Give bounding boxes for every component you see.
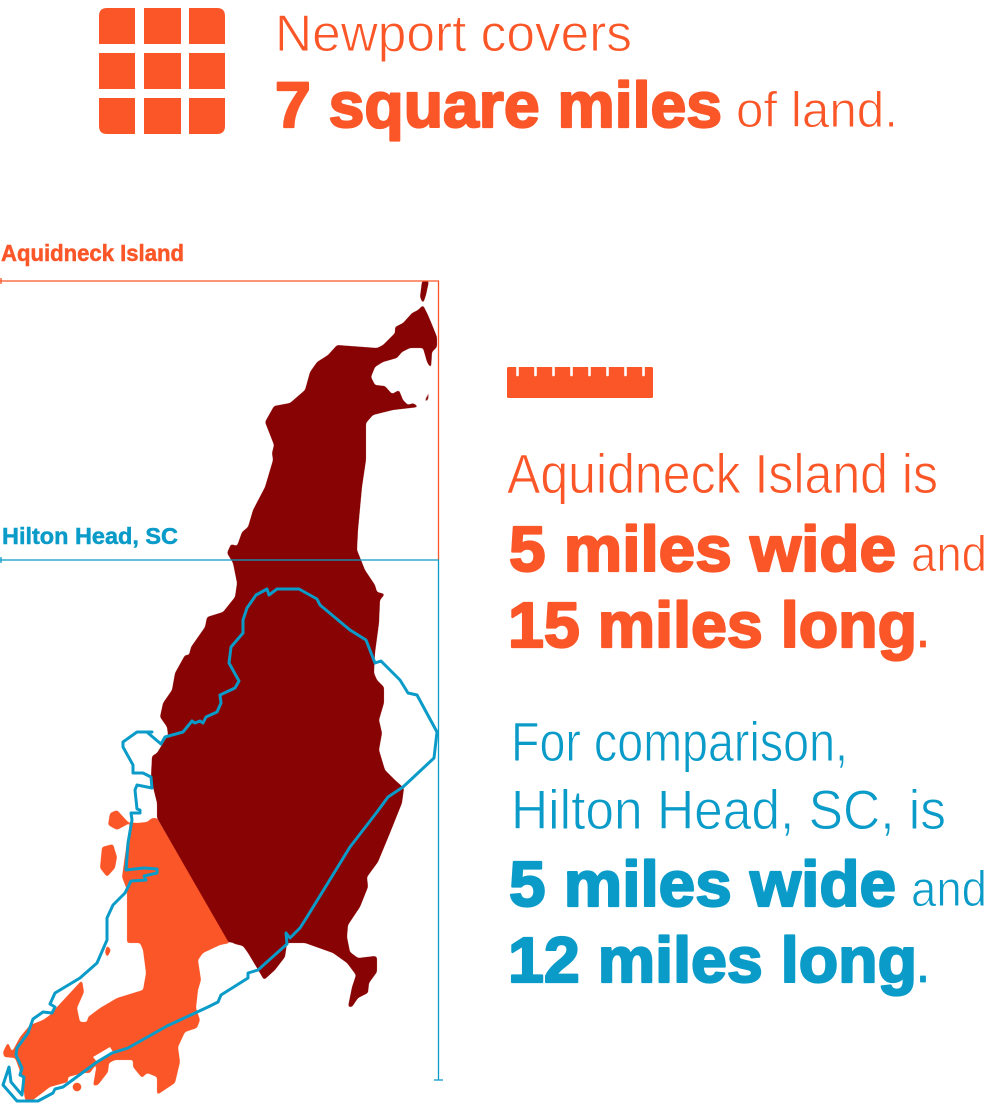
text: Aquidneck Island dimensions: and xyxy=(911,526,987,582)
text: Aquidneck Island dimensions: Aquidneck Island is xyxy=(507,442,938,505)
heading: Newport covers 7 square miles of land: Newport covers xyxy=(275,5,632,63)
map: Newport orange area xyxy=(3,810,230,1100)
text: Hilton Head comparison: . xyxy=(918,947,928,991)
text: Hilton Head comparison: 12 miles long xyxy=(508,924,917,996)
text: Aquidneck Island dimensions: 15 miles long xyxy=(508,589,917,661)
map: white inlet in Newport xyxy=(93,1047,113,1062)
text: Hilton Head comparison: Hilton Head, SC, is xyxy=(511,778,946,841)
icon: square-mile grid xyxy=(99,8,225,134)
text: Aquidneck Island dimensions: . xyxy=(918,612,928,656)
icon: ruler xyxy=(507,366,653,398)
map: Aquidneck Island dark red shape xyxy=(151,281,437,1007)
text: Aquidneck Island dimensions xyxy=(507,442,987,661)
map: Hilton Head blue outline xyxy=(3,589,437,1101)
heading: Newport covers 7 square miles of land xyxy=(275,5,898,141)
text: Hilton Head comparison xyxy=(508,710,987,996)
heading: Newport covers 7 square miles of land: of land. xyxy=(736,82,898,138)
text: Hilton Head comparison: 5 miles wide xyxy=(509,848,896,920)
label: Aquidneck Island: Aquidneck Island xyxy=(1,240,184,266)
dimension line: Aquidneck Island extent xyxy=(0,278,438,560)
label: Hilton Head, SC: Hilton Head, SC xyxy=(2,523,178,549)
heading: Newport covers 7 square miles of land: 7 square miles xyxy=(275,69,722,141)
dimension line: Hilton Head extent xyxy=(0,557,443,1080)
text: Hilton Head comparison: and xyxy=(911,861,987,917)
text: Aquidneck Island dimensions: 5 miles wide xyxy=(509,513,896,585)
text: Hilton Head comparison: For comparison, xyxy=(511,710,848,773)
